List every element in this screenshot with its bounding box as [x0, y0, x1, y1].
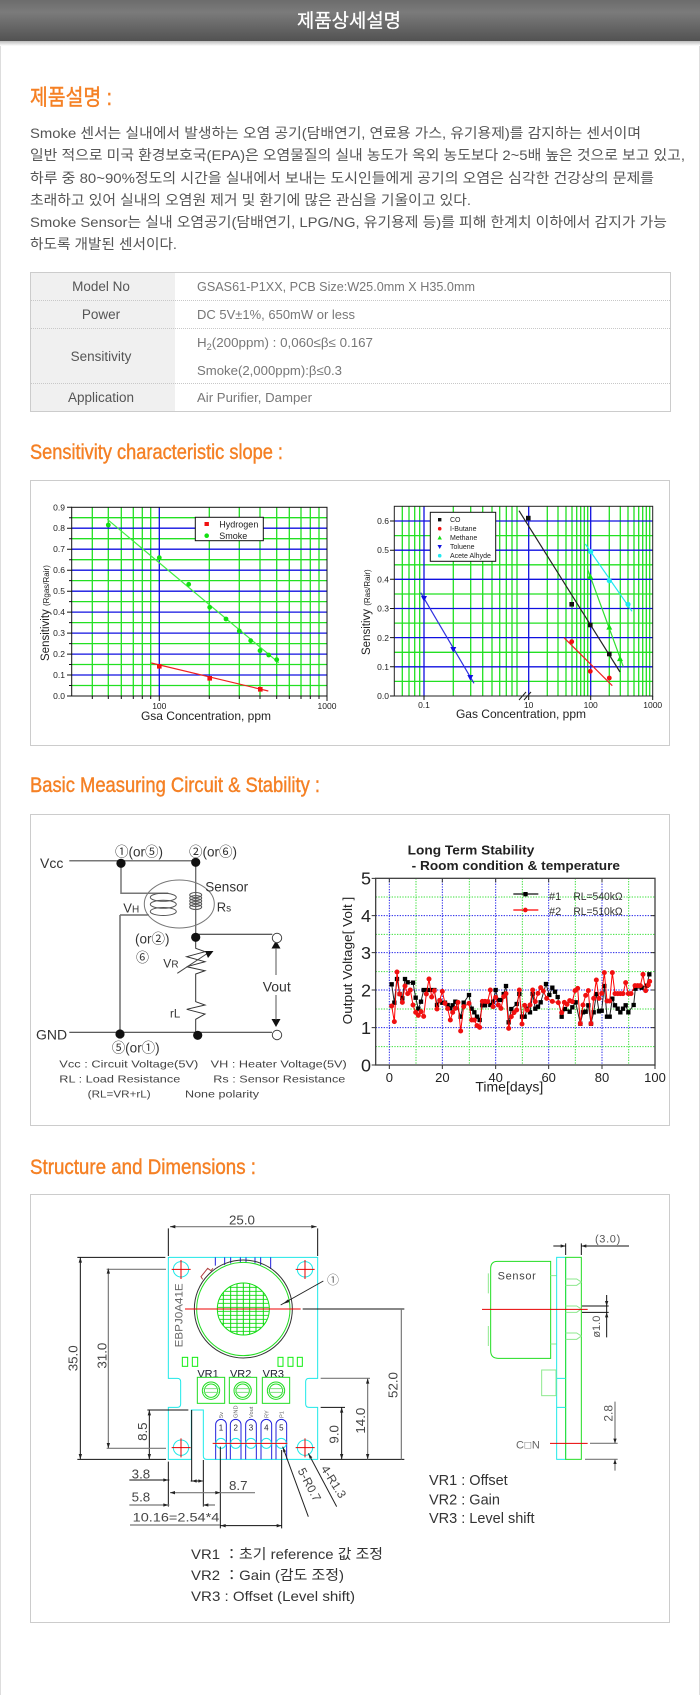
specification table: [30, 272, 670, 412]
circuit diagram: Vout: [263, 979, 291, 995]
side dimensions: 2.8: [601, 1405, 615, 1422]
circuit legend text: [59, 1059, 347, 1101]
specification table: (200ppm) : 0,060≤β≤ 0.167: [212, 335, 373, 350]
circuit legend text: Vcc : Circuit Voltage(5V): [59, 1059, 198, 1071]
circuit diagram: Sensor: [205, 880, 249, 895]
drawing: side view: Sensor: [498, 1270, 536, 1282]
chart: other gases sensitivity: 0.5: [377, 545, 389, 555]
circuit diagram: ⑥: [136, 950, 149, 965]
trimmers VR1 VR2 VR3: VR2: [230, 1368, 251, 1380]
chart: other gases sensitivity: 0.1: [377, 662, 389, 672]
side dimensions: ø1.0: [591, 1316, 603, 1338]
dimension lines: 5-R0.7: [295, 1465, 324, 1504]
chart: hydrogen and smoke sensitivity: 1000: [318, 701, 337, 711]
specification table: Power: [82, 307, 121, 322]
legend: hydrogen and smoke: Hydrogen: [219, 519, 258, 529]
text block: product description: 초래하고 있어 실내의 오염원 제거 및 환기에 많은 관심을 기울이고 있다.: [30, 192, 471, 208]
chart: hydrogen and smoke sensitivity: 0.0: [53, 691, 65, 701]
text block: side view notes: [429, 1473, 535, 1527]
heading: circuit and stability: Basic Measuring Circuit & Stability :: [30, 774, 320, 797]
dimension lines: 9.0: [326, 1425, 341, 1444]
chart: long term stability: 0: [386, 1070, 393, 1085]
drawing: PCB top view with dimensions: [65, 1212, 404, 1528]
dimension lines: 3.8: [132, 1466, 150, 1481]
trimmers VR1 VR2 VR3: [197, 1368, 290, 1403]
chart: hydrogen and smoke sensitivity: Gsa Concentration, ppm: [141, 709, 271, 723]
text block: product description: 하루 중 80~90%정도의 시간을 실내에서 보내는 도시인들에게 공기의 오염은 심각한 건강상의 문제를: [30, 170, 654, 186]
stability legend: RL=540kΩ: [573, 891, 623, 903]
dimension lines: 8.5: [135, 1422, 150, 1441]
panel: sensitivity charts: [30, 480, 670, 746]
chart: hydrogen and smoke sensitivity: 100: [152, 701, 167, 711]
dimension lines: 35.0: [65, 1345, 80, 1371]
text block: product description: Smoke Sensor는 실내 오염공기(담배연기, LPG/NG, 유기용제 등)를 피해 한계치 이하에서 감지가 가능: [30, 214, 667, 230]
panel: structure and dimensions: [30, 1194, 670, 1622]
circuit diagram: GND: [36, 1026, 67, 1042]
chart: long term stability: 0: [361, 1055, 371, 1075]
connector pins: 4: [264, 1423, 269, 1432]
circuit diagram: ①(or⑤): [115, 845, 163, 860]
chart: other gases sensitivity: 0.6: [377, 516, 389, 526]
chart: hydrogen and smoke sensitivity: 0.4: [53, 607, 65, 617]
legend: hydrogen and smoke: Smoke: [219, 531, 247, 541]
circuit legend text: (RL=VR+rL): [88, 1089, 151, 1101]
legend: gases: CO: [450, 517, 461, 524]
heading: structure and dimensions: Structure and Dimensions :: [30, 1156, 256, 1179]
dimension lines: 10.16=2.54*4: [133, 1511, 220, 1525]
connector pins: 5: [279, 1423, 284, 1432]
sensor body: [491, 1261, 551, 1358]
chart: hydrogen and smoke sensitivity: 0.2: [53, 649, 65, 659]
side dimensions: [553, 1234, 629, 1471]
chart: long term stability: 4: [361, 906, 371, 926]
stability legend: RL=510kΩ: [573, 906, 623, 918]
chart: other gases sensitivity: [361, 506, 662, 721]
chart: other gases sensitivity: 0.4: [377, 574, 389, 584]
chart: long term stability: 20: [435, 1070, 450, 1085]
mounting holes: [172, 1260, 315, 1457]
text block: trimmer notes Korean: VR1 ：초기 reference 값 조정: [191, 1546, 383, 1562]
circuit diagram: Rs: [217, 900, 231, 915]
chart: hydrogen and smoke sensitivity: 0.5: [53, 586, 65, 596]
chart: other gases sensitivity: 0.0: [377, 691, 389, 701]
chart: hydrogen and smoke sensitivity: 0.6: [53, 565, 65, 575]
text block: trimmer notes Korean: VR2 ：Gain (감도 조정): [191, 1567, 344, 1583]
stability legend: #1: [549, 891, 561, 903]
specification table: Application: [68, 390, 134, 405]
chart: hydrogen and smoke sensitivity: 0.7: [53, 544, 65, 554]
side dimensions: (3.0): [595, 1234, 621, 1246]
chart: hydrogen and smoke sensitivity: 0.9: [53, 502, 65, 512]
connector pins: 5v: [219, 1412, 225, 1418]
dimension lines: 5.8: [132, 1490, 150, 1505]
sensor symbol: [144, 880, 214, 928]
specification table: Air Purifier, Damper: [197, 390, 313, 405]
circuit diagram: (or②): [135, 931, 170, 946]
circuit diagram: VH: [123, 901, 139, 916]
chart: hydrogen and smoke sensitivity: [40, 502, 337, 723]
chart: long term stability: 3: [361, 943, 371, 963]
specification table: Sensitivity: [71, 349, 132, 364]
legend: gases: [430, 512, 496, 561]
chart: hydrogen and smoke sensitivity: 0.8: [53, 523, 65, 533]
circuit legend text: RL : Load Resistance: [59, 1074, 180, 1086]
chart: long term stability: 1: [361, 1018, 371, 1038]
dimension lines: 52.0: [385, 1372, 400, 1398]
text block: trimmer notes Korean: [191, 1546, 383, 1604]
dimension lines: 8.7: [229, 1478, 248, 1493]
chart: long term stability: 80: [595, 1070, 609, 1085]
specification table: H: [197, 335, 206, 350]
drawing: PCB top view with dimensions: EBPJ0A41E: [174, 1283, 186, 1347]
drawing: side view: [482, 1234, 629, 1471]
stability legend: [513, 891, 623, 918]
board outline: [168, 1257, 318, 1459]
circuit diagram: rL: [170, 1008, 181, 1020]
chart: long term stability: - Room condition & temperature: [412, 859, 620, 873]
specification table: Smoke(2,000ppm):β≤0.3: [197, 363, 342, 378]
specification table: 2: [207, 342, 212, 352]
header bar with title: 제품상세설명: [297, 10, 401, 32]
legend: gases: Toluene: [450, 544, 475, 551]
series 2 red: [392, 972, 650, 1031]
dimension lines: 14.0: [353, 1408, 368, 1434]
dimension lines: 25.0: [229, 1212, 255, 1227]
chart: long term stability: 2: [361, 980, 371, 1000]
dimension lines: 31.0: [94, 1343, 109, 1369]
chart: other gases sensitivity: 0.2: [377, 633, 389, 643]
circuit diagram: ⑤(or①): [112, 1041, 160, 1056]
circuit legend text: Rs : Sensor Resistance: [213, 1074, 345, 1086]
specification table: DC 5V±1%, 650mW or less: [197, 307, 355, 322]
heading: sensitivity slope: Sensitivity characteristic slope :: [30, 441, 283, 464]
chart: hydrogen and smoke sensitivity: Sensitivity (Rgas/Rair): [40, 565, 52, 661]
header bar with title: [0, 0, 700, 46]
legend: gases: Acete Alhyde: [450, 553, 491, 560]
connector pins: GND: [234, 1405, 240, 1418]
circuit diagram: VR: [163, 956, 179, 970]
chart: long term stability: [340, 843, 666, 1095]
axis break mark: [519, 692, 531, 700]
dimension lines: ①: [327, 1273, 339, 1287]
text block: product description: 하도록 개발된 센서이다.: [30, 236, 177, 252]
text block: product description: [30, 125, 685, 252]
connector pins: RY: [264, 1410, 270, 1418]
chart: long term stability: Time[days]: [475, 1079, 543, 1095]
heading: product description: 제품설명 :: [30, 85, 112, 110]
text block: product description: 일반 적으로 미국 환경보호국(EPA)은 오염물질의 실내 농도가 옥외 농도보다 2~5배 높은 것으로 보고 있고,: [30, 147, 685, 163]
circuit diagram: [36, 845, 347, 1101]
chart: other gases sensitivity: Gas Concentration, ppm: [456, 707, 586, 721]
board edge: [557, 1257, 566, 1459]
connector pins: P1: [279, 1411, 285, 1418]
chart: hydrogen and smoke sensitivity: 0.1: [53, 670, 65, 680]
text block: trimmer notes Korean: VR3 : Offset (Level shift): [191, 1588, 355, 1604]
dimension lines: [65, 1212, 404, 1528]
circuit diagram: ②(or⑥): [189, 845, 237, 860]
chart: long term stability: Long Term Stability: [408, 843, 534, 857]
text block: side view notes: VR3 : Level shift: [429, 1511, 535, 1527]
drawing: side view: C□N: [516, 1440, 540, 1452]
chart: other gases sensitivity: 0.1: [418, 700, 430, 710]
circuit diagram: Vcc: [40, 855, 63, 871]
trimmers VR1 VR2 VR3: VR1: [197, 1368, 219, 1380]
circuit legend text: None polarity: [185, 1089, 260, 1101]
connector pins: 2: [233, 1423, 238, 1432]
chart: long term stability: 40: [488, 1070, 503, 1085]
chart: long term stability: Output Voltage[ Volt ]: [340, 897, 355, 1024]
dimension lines: 4-R1.3: [318, 1463, 349, 1501]
chart: hydrogen and smoke sensitivity: 0.3: [53, 628, 65, 638]
chart: other gases sensitivity: 1000: [643, 700, 662, 710]
legend: gases: I-Butane: [450, 526, 477, 533]
chart: other gases sensitivity: 0.3: [377, 604, 389, 614]
text block: side view notes: VR2 : Gain: [429, 1492, 500, 1508]
specification table: GSAS61-P1XX, PCB Size:W25.0mm X H35.0mm: [197, 279, 475, 294]
trimmers VR1 VR2 VR3: VR3: [263, 1368, 284, 1380]
connector pins: 1: [219, 1423, 224, 1432]
series 1 black: [392, 974, 649, 1024]
text block: side view notes: VR1 : Offset: [429, 1473, 508, 1489]
text block: product description: Smoke 센서는 실내에서 발생하는 오염 공기(담배연기, 연료용 가스, 유기용제)를 감지하는 센서이며: [30, 125, 641, 141]
chart: other gases sensitivity: Sensitivy (Ras/Rair): [361, 569, 373, 655]
sensor circles: [194, 1260, 292, 1358]
specification table: Model No: [72, 279, 130, 294]
chart: long term stability: 100: [644, 1070, 666, 1085]
chart: long term stability: 60: [541, 1070, 556, 1085]
connector pins: [213, 1405, 287, 1459]
legend: gases: Methane: [450, 535, 477, 542]
circuit legend text: VH : Heater Voltage(5V): [211, 1059, 347, 1071]
chart: long term stability: 5: [361, 869, 371, 889]
stability legend: #2: [549, 906, 561, 918]
legend: hydrogen and smoke: [195, 517, 263, 541]
panel: circuit and stability: [30, 814, 670, 1126]
chart: other gases sensitivity: 10: [524, 700, 534, 710]
connector pins: 3: [249, 1423, 254, 1432]
chart: other gases sensitivity: 100: [584, 700, 598, 710]
connector pins: Vout: [249, 1406, 255, 1418]
